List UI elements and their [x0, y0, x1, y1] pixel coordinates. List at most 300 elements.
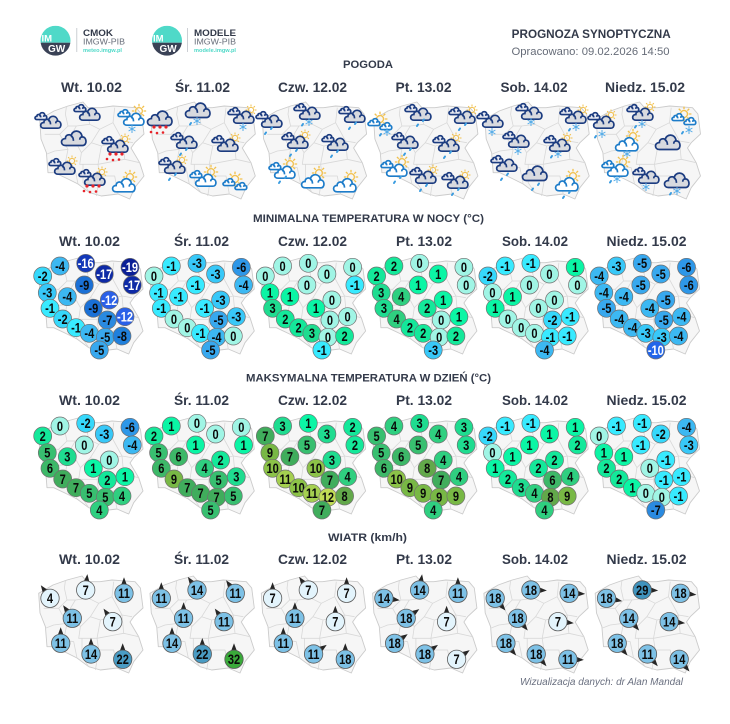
day heading: Niedz. 15.02 [605, 79, 685, 95]
icon: cloud and sun [79, 166, 108, 185]
t -2: -2 [656, 427, 666, 442]
t 1: 1 [267, 285, 273, 301]
t 0: 0 [324, 267, 330, 282]
t 9: 9 [453, 489, 459, 504]
logo: MODELE IMGW-PIB: MODELE [194, 28, 236, 39]
icon: sun and cloud [556, 169, 580, 191]
t 0: 0 [551, 293, 558, 308]
t 0: 0 [659, 490, 665, 505]
t -12: -12 [101, 293, 117, 308]
t -3: -3 [641, 326, 651, 341]
wind 32: 32 [228, 652, 240, 667]
t 8: 8 [424, 461, 430, 476]
wind 18: 18 [339, 652, 352, 667]
t 2: 2 [104, 473, 111, 488]
t -1: -1 [677, 469, 687, 485]
icon: rain and snow [635, 120, 645, 128]
title: PROGNOZA SYNOPTYCZNA [512, 29, 671, 41]
day heading: Sob. 14.02 [502, 233, 568, 249]
icon: rain [444, 152, 451, 158]
t 7: 7 [214, 490, 220, 505]
t -2: -2 [548, 313, 558, 328]
map [373, 257, 477, 354]
panel: wind Niedz. 15.02 [595, 576, 700, 673]
footer credit: Wizualizacja danych: dr Alan Mandal [520, 677, 684, 688]
t -1: -1 [45, 301, 55, 316]
t 7: 7 [327, 473, 333, 488]
t -2: -2 [38, 269, 48, 284]
wind 18: 18 [600, 591, 613, 606]
icon: rain [169, 174, 176, 180]
t 0: 0 [574, 278, 581, 293]
icon: cloud [392, 133, 418, 148]
wind 11: 11 [289, 611, 301, 626]
t 4: 4 [345, 469, 351, 485]
t -8: -8 [117, 329, 127, 344]
t 6: 6 [176, 449, 182, 465]
t 3: 3 [518, 480, 524, 496]
t -5: -5 [637, 256, 647, 271]
icon: cloud [294, 104, 320, 119]
t 1: 1 [168, 419, 175, 434]
t 0: 0 [531, 326, 538, 341]
t -16: -16 [78, 256, 94, 271]
t 0: 0 [505, 312, 511, 327]
t -5: -5 [206, 343, 216, 358]
icon: rain [417, 120, 424, 126]
t -6: -6 [684, 278, 694, 293]
panel: max temperature Czw. 12.02 [256, 414, 366, 519]
t -4: -4 [212, 330, 222, 345]
wind 14: 14 [563, 586, 575, 601]
t 3: 3 [463, 438, 469, 453]
t 2: 2 [420, 326, 426, 341]
t -6: -6 [125, 420, 135, 435]
icon: overcast [147, 111, 172, 125]
panel: min temperature Śr. 11.02 [145, 254, 254, 359]
day heading: Pt. 13.02 [396, 233, 452, 249]
t -1: -1 [191, 278, 201, 293]
t 2: 2 [535, 461, 542, 476]
t -2: -2 [81, 416, 91, 431]
wind 7: 7 [344, 586, 350, 601]
t 6: 6 [158, 461, 165, 476]
wind 18: 18 [400, 611, 412, 626]
icon: cloud and sun [433, 132, 462, 151]
logo: CMOK IMGW-PIB: CMOK [83, 28, 113, 39]
t -1: -1 [546, 330, 556, 345]
wind 14: 14 [378, 591, 390, 606]
t -1: -1 [500, 259, 510, 274]
section heading: wind: WIATR (km/h) [328, 532, 407, 544]
icon: cloud and sun [282, 130, 310, 148]
t 5: 5 [415, 438, 421, 453]
icon: cloud [74, 105, 100, 120]
wind 7: 7 [332, 614, 339, 630]
icon: cloud [633, 168, 659, 183]
map [261, 417, 366, 514]
t 1: 1 [572, 420, 578, 435]
t 0: 0 [526, 278, 533, 293]
t 8: 8 [342, 489, 348, 504]
t 0: 0 [238, 420, 245, 435]
logo: CMOK IMGW-PIB [40, 26, 125, 56]
t 7: 7 [60, 472, 66, 487]
t -3: -3 [99, 427, 109, 442]
map [39, 417, 143, 514]
t -1: -1 [636, 438, 646, 453]
map [595, 417, 700, 514]
t 5: 5 [156, 445, 162, 461]
icon: rain and snow [595, 130, 605, 138]
day heading: Czw. 12.02 [278, 233, 347, 249]
icon: rain [563, 192, 570, 198]
t 1: 1 [90, 461, 97, 476]
t 0: 0 [436, 330, 442, 345]
t -5: -5 [602, 301, 612, 316]
t -6: -6 [682, 260, 692, 275]
icon: rain and snow [380, 128, 390, 136]
icon: cloud [516, 104, 542, 119]
t -10: -10 [648, 343, 664, 358]
t 0: 0 [535, 301, 542, 316]
t 4: 4 [391, 419, 397, 434]
t 2: 2 [505, 472, 511, 487]
panel: wind Śr. 11.02 [150, 575, 254, 673]
panel: weather Pt. 13.02 [368, 102, 478, 199]
day heading: Niedz. 15.02 [606, 551, 687, 567]
t 2: 2 [391, 259, 397, 274]
t 0: 0 [438, 313, 444, 328]
icon: sun and small clouds [223, 172, 247, 190]
map [485, 102, 589, 199]
t -6: -6 [236, 260, 246, 275]
icon: red rain [150, 125, 168, 134]
icon: sun and small clouds [672, 107, 696, 125]
t -17: -17 [124, 278, 140, 293]
t 7: 7 [184, 480, 191, 496]
map [39, 576, 143, 673]
icon: cloud [477, 112, 503, 127]
wind 11: 11 [642, 647, 653, 662]
icon: cloud [491, 156, 517, 171]
t 2: 2 [424, 301, 430, 316]
t 0: 0 [345, 309, 351, 325]
wind 18: 18 [674, 586, 687, 601]
wind 11: 11 [55, 636, 67, 651]
t -1: -1 [526, 416, 536, 431]
icon: snow [240, 123, 246, 131]
t 1: 1 [122, 469, 128, 485]
map [595, 257, 700, 354]
t 1: 1 [456, 309, 462, 325]
map [262, 102, 367, 199]
map [261, 257, 366, 354]
day heading: Pt. 13.02 [396, 551, 452, 567]
t 3: 3 [309, 326, 315, 341]
t 1: 1 [546, 427, 553, 442]
map [39, 257, 143, 354]
t 7: 7 [73, 480, 79, 496]
map [595, 576, 700, 673]
panel: weather Czw. 12.02 [256, 102, 367, 199]
t 1: 1 [509, 289, 516, 305]
icon: sun and small clouds [368, 112, 392, 130]
t 4: 4 [398, 289, 404, 305]
day heading: Sob. 14.02 [502, 551, 568, 567]
icon: rain [452, 188, 459, 195]
wind 29: 29 [636, 583, 648, 598]
t 2: 2 [374, 269, 380, 284]
t 11: 11 [306, 486, 318, 501]
wind 7: 7 [83, 583, 89, 598]
t 0: 0 [417, 256, 423, 271]
t 7: 7 [198, 486, 204, 501]
t 9: 9 [171, 472, 177, 487]
t 4: 4 [435, 427, 441, 442]
panel: wind Wt. 10.02 [38, 574, 143, 673]
t -12: -12 [117, 309, 133, 325]
logo: MODELE IMGW-PIB: GW [160, 44, 177, 55]
icon: sun and cloud [269, 157, 297, 178]
icon: rain [420, 184, 427, 191]
t 0: 0 [151, 269, 157, 284]
t -5: -5 [636, 278, 646, 293]
wind 22: 22 [196, 647, 209, 662]
panel: weather Wt. 10.02 [35, 102, 146, 199]
icon: rain [501, 174, 508, 180]
day heading: Śr. 11.02 [174, 232, 229, 249]
icon: snow [643, 183, 649, 191]
day heading: Wt. 10.02 [59, 233, 120, 249]
icon: cloud [339, 107, 365, 122]
t 0: 0 [463, 278, 469, 293]
t -5: -5 [214, 313, 224, 328]
t 1: 1 [492, 461, 498, 476]
wind 18: 18 [388, 636, 401, 651]
t 1: 1 [193, 438, 199, 453]
panel: wind Czw. 12.02 [261, 575, 366, 673]
icon: cloud and sun [560, 104, 588, 123]
t -7: -7 [102, 313, 112, 328]
t 0: 0 [546, 267, 553, 282]
t -4: -4 [127, 438, 137, 453]
wind 11: 11 [229, 586, 241, 601]
logo: CMOK IMGW-PIB: GW [48, 44, 66, 55]
t -3: -3 [657, 330, 667, 345]
t 2: 2 [352, 438, 358, 453]
t -9: -9 [79, 278, 89, 293]
wind 18: 18 [419, 647, 431, 662]
t 2: 2 [603, 461, 610, 476]
day heading: Czw. 12.02 [278, 551, 347, 567]
icon: overcast [522, 166, 547, 180]
day heading: Śr. 11.02 [175, 78, 230, 95]
icon: snow [515, 147, 521, 155]
t -1: -1 [661, 453, 671, 468]
section heading: weather: POGODA [343, 59, 393, 71]
t 3: 3 [378, 285, 384, 301]
day heading: Śr. 11.02 [174, 550, 229, 567]
panel: min temperature Czw. 12.02 [256, 254, 366, 359]
t 0: 0 [171, 312, 177, 327]
wind 7: 7 [454, 652, 460, 667]
icon: sun and cloud [113, 170, 137, 192]
icon: cloud and sun [588, 110, 616, 128]
icon: sun and cloud [602, 155, 630, 176]
t 1: 1 [305, 416, 312, 431]
t 5: 5 [216, 473, 222, 488]
t -4: -4 [540, 343, 550, 358]
logo: MODELE IMGW-PIB: IM [153, 34, 164, 44]
t -1: -1 [166, 259, 176, 274]
logo: CMOK IMGW-PIB: meteo.imgw.pl [83, 48, 122, 54]
t 2: 2 [151, 429, 157, 444]
wind 14: 14 [191, 583, 203, 598]
t -4: -4 [614, 312, 624, 327]
map [261, 576, 366, 673]
icon: cloud and sun [627, 102, 656, 120]
logo: MODELE IMGW-PIB: IMGW-PIB [194, 36, 236, 46]
t 5: 5 [304, 438, 310, 453]
icon: overcast [664, 173, 689, 187]
t 1: 1 [287, 289, 293, 305]
t 0: 0 [81, 438, 88, 453]
icon: rain [394, 176, 401, 183]
t -3: -3 [42, 285, 52, 301]
t 4: 4 [202, 461, 208, 476]
t 5: 5 [208, 503, 214, 518]
icon: rain [331, 150, 338, 157]
t 5: 5 [378, 445, 384, 461]
section heading: max temperature: MAKSYMALNA TEMPERATURA W DZIEŃ (°C) [246, 372, 491, 384]
t 3: 3 [233, 469, 240, 485]
icon: rain [279, 176, 286, 183]
t 0: 0 [106, 453, 113, 468]
t -3: -3 [684, 438, 694, 453]
t -5: -5 [656, 267, 666, 282]
t 0: 0 [327, 313, 333, 328]
wind 14: 14 [85, 647, 97, 662]
t -4: -4 [62, 289, 72, 305]
t -3: -3 [612, 259, 622, 274]
t 5: 5 [86, 486, 93, 501]
wind 7: 7 [270, 591, 276, 606]
t 0: 0 [643, 486, 649, 501]
t 10: 10 [266, 461, 279, 476]
t 3: 3 [324, 427, 330, 442]
t -4: -4 [674, 329, 684, 344]
wind 22: 22 [117, 652, 129, 667]
panel: min temperature Wt. 10.02 [34, 254, 143, 359]
map [373, 417, 477, 514]
day heading: Pt. 13.02 [396, 79, 452, 95]
icon: cloud [256, 112, 282, 127]
t 0: 0 [57, 419, 63, 434]
t -1: -1 [526, 256, 536, 271]
t 12: 12 [322, 490, 334, 505]
day heading: Śr. 11.02 [174, 391, 229, 408]
map [484, 417, 588, 514]
t 1: 1 [241, 438, 247, 453]
wind 14: 14 [166, 636, 178, 651]
day heading: Czw. 12.02 [278, 79, 347, 95]
t 2: 2 [574, 438, 581, 453]
t -4: -4 [682, 420, 692, 435]
t 2: 2 [616, 472, 622, 487]
t -7: -7 [651, 503, 661, 518]
t 0: 0 [262, 269, 269, 284]
wind 14: 14 [623, 611, 635, 626]
t 2: 2 [218, 453, 224, 468]
t 11: 11 [279, 472, 291, 487]
t 0: 0 [280, 259, 286, 274]
icon: red rain [83, 184, 101, 193]
icon: rain and snow [670, 187, 680, 195]
wind 11: 11 [118, 586, 130, 601]
map [596, 102, 700, 199]
t 4: 4 [394, 312, 400, 327]
t 9: 9 [436, 490, 442, 505]
t -1: -1 [674, 489, 684, 504]
day heading: Niedz. 15.02 [606, 233, 687, 249]
t -4: -4 [55, 259, 65, 274]
t 9: 9 [420, 486, 426, 501]
t 10: 10 [390, 472, 403, 487]
t 0: 0 [489, 285, 496, 301]
icon: rain and snow [610, 175, 620, 183]
logo: MODELE IMGW-PIB: modele.imgw.pl [194, 48, 236, 54]
t -4: -4 [599, 285, 609, 301]
icon: sun and cloud [118, 104, 146, 125]
wind 4: 4 [47, 591, 53, 606]
t 5: 5 [102, 490, 109, 505]
t -4: -4 [239, 278, 249, 293]
t -1: -1 [154, 285, 164, 301]
t 1: 1 [629, 480, 636, 496]
day heading: Niedz. 15.02 [606, 392, 687, 408]
panel: weather Śr. 11.02 [147, 102, 256, 199]
t 4: 4 [531, 486, 538, 501]
panel: min temperature Pt. 13.02 [368, 254, 477, 359]
wind 7: 7 [555, 614, 561, 630]
t 9: 9 [564, 489, 570, 504]
icon: cloud [35, 113, 61, 128]
icon: cloud and sun [442, 170, 470, 188]
wind 18: 18 [489, 591, 501, 606]
t 4: 4 [119, 489, 125, 504]
t 3: 3 [461, 420, 467, 435]
t -4: -4 [628, 320, 638, 336]
t 1: 1 [313, 301, 319, 316]
t -5: -5 [94, 343, 104, 358]
t 4: 4 [456, 469, 462, 485]
wind 11: 11 [452, 586, 464, 601]
icon: snow [129, 125, 135, 133]
panel: wind Pt. 13.02 [373, 574, 477, 673]
icon: cloud and sun [159, 154, 188, 173]
t -2: -2 [483, 429, 493, 444]
panel: min temperature Niedz. 15.02 [590, 254, 700, 359]
t 2: 2 [282, 312, 289, 327]
t -3: -3 [216, 293, 226, 308]
t 1: 1 [621, 449, 627, 465]
wind 11: 11 [218, 614, 230, 630]
icon: sun and cloud [381, 155, 409, 176]
t -4: -4 [594, 269, 604, 284]
icon: cloud [405, 105, 431, 120]
map [374, 102, 478, 199]
